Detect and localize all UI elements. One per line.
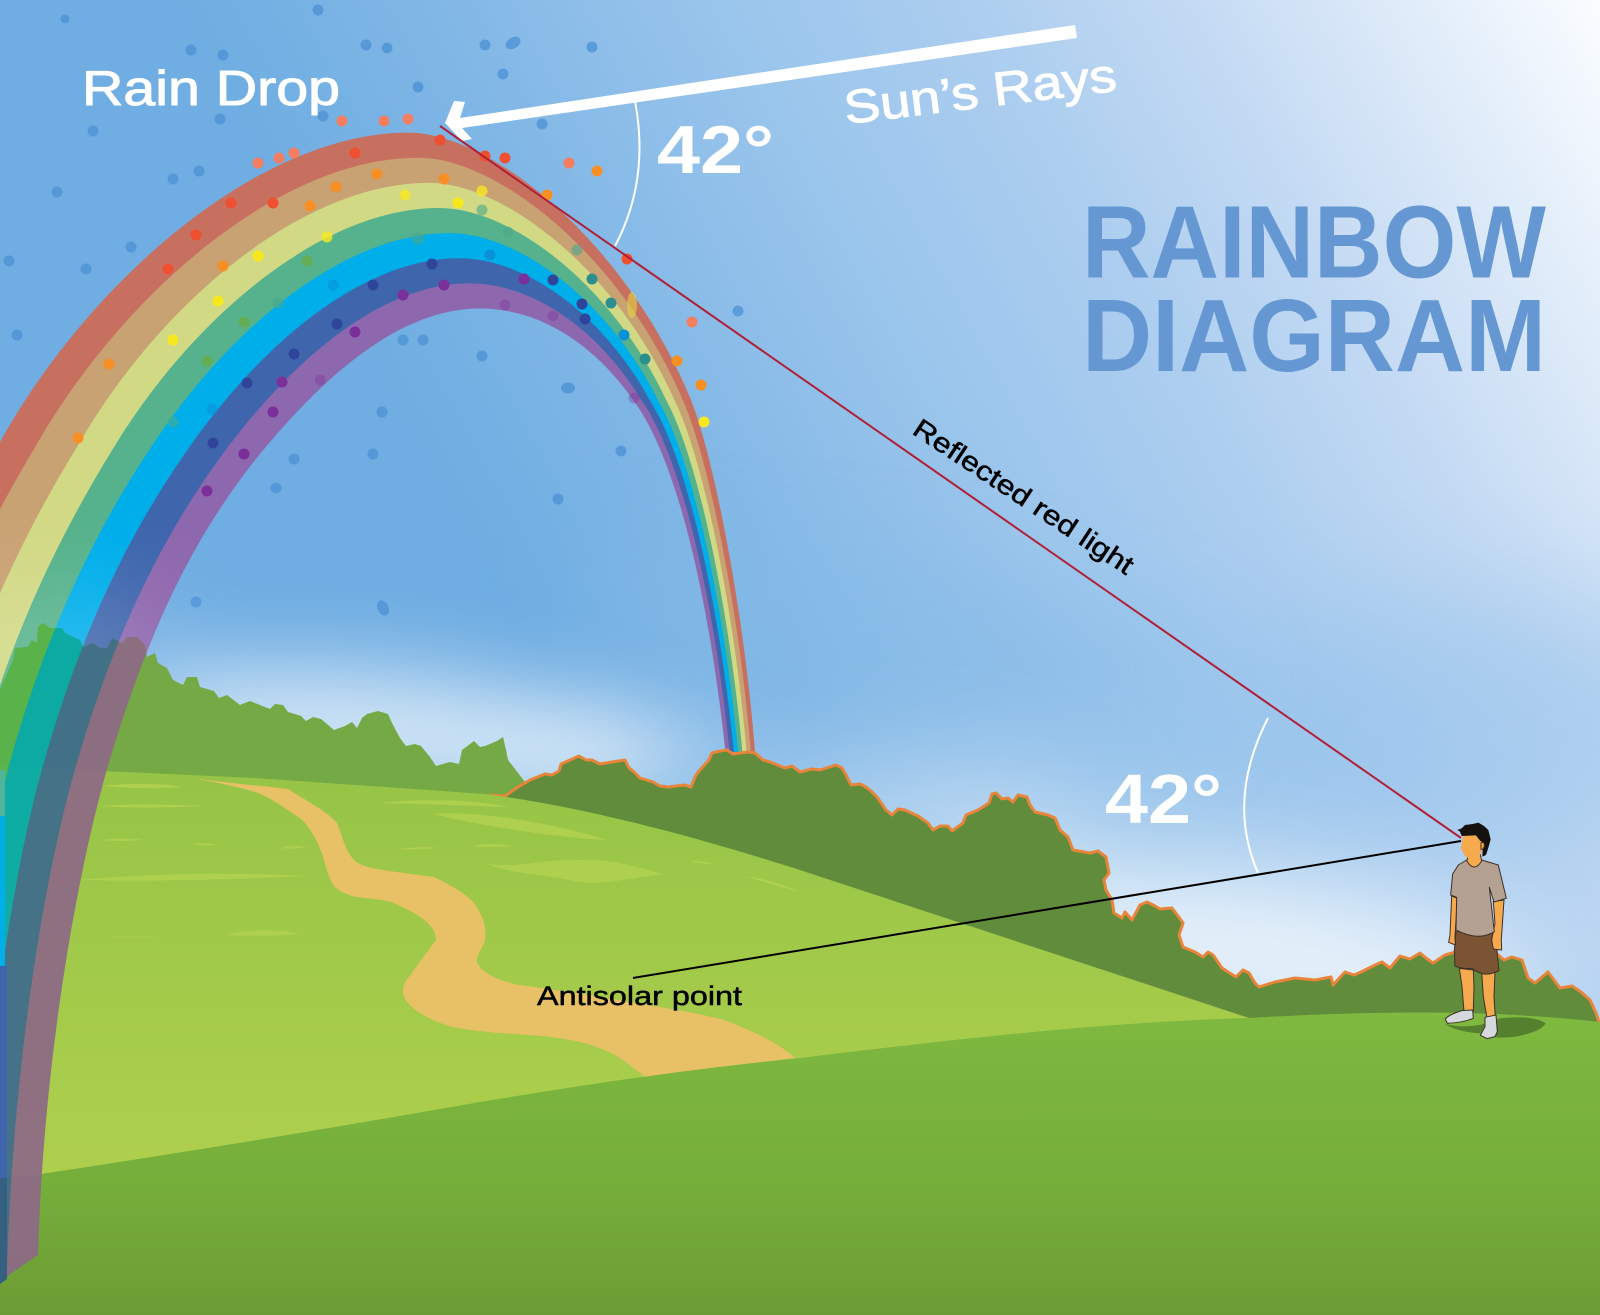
drops: teal and muted green [168,204,582,428]
drops: salmon [252,114,698,328]
drops: orange [72,166,706,444]
drops: dark teal [586,274,650,364]
drops: indigo [208,258,590,448]
title: RAINBOW [1082,184,1547,300]
label: lower 42 degrees: 42° [1105,760,1222,838]
label: sun's rays: Sun’s Rays [841,48,1119,134]
label: antisolar point: Antisolar point [537,981,743,1011]
drops: blue [206,250,630,414]
drops: red [162,134,632,274]
rainbow base overlapping the landscape [0,623,146,1276]
meadow grass highlights [77,784,800,938]
rainbow arch [0,132,755,752]
foreground hill [0,1012,1600,1315]
dark green bushes with orange outline [490,750,1600,1120]
drops: yellow [168,186,710,428]
face [1461,833,1483,859]
winding dirt path [186,777,795,1077]
drops: violet [202,274,640,496]
shoes [1445,1010,1497,1039]
light green meadow [0,766,1249,1200]
ear [1481,842,1484,849]
title: DIAGRAM [1082,278,1546,393]
rain drops over the sky [4,4,744,618]
label: rain drop: Rain Drop [82,62,340,116]
t-shirt [1451,860,1506,936]
reflected red light line [440,126,1461,838]
rainbow strip at the left edge [0,770,7,1284]
legs [1459,968,1495,1020]
observer figure [1445,823,1546,1039]
label: reflected red light: Reflected red light [908,413,1140,581]
arms [1449,896,1504,950]
shorts [1454,931,1499,974]
shadow [1445,1017,1546,1037]
drops: green [202,256,312,366]
label: upper 42 degrees: 42° [657,112,774,188]
refracted coloured rain drops [72,114,710,496]
antisolar line [633,841,1461,978]
title [1082,184,1547,393]
angle arc at rain drop [615,101,640,246]
angle arc at observer [1244,718,1268,873]
hair [1457,823,1491,857]
neck [1467,853,1482,867]
distant light green tree line [0,623,540,830]
arrow: sun's ray [445,25,1077,141]
